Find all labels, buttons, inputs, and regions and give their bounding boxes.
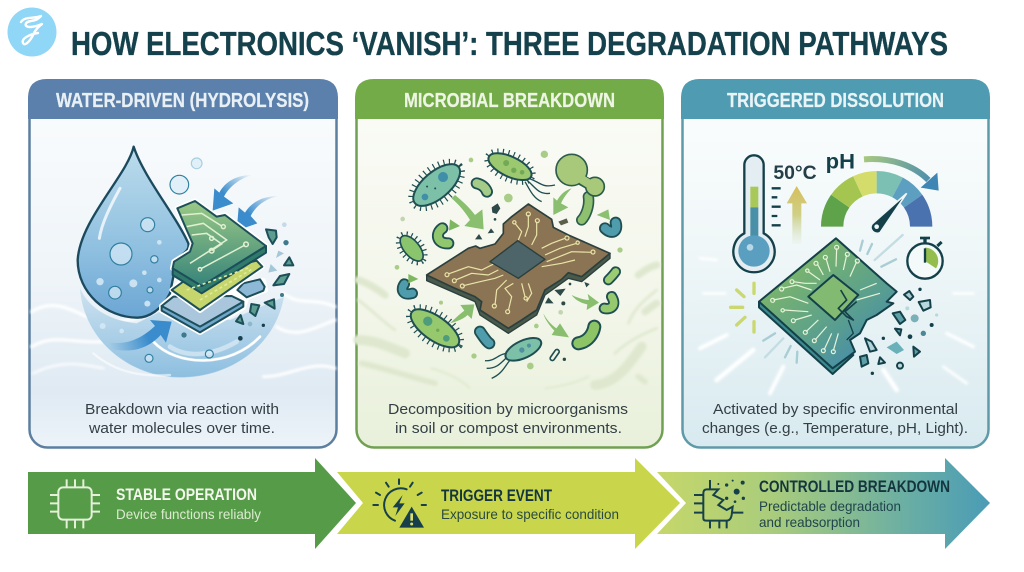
label: pH: pH	[826, 149, 855, 173]
icon: crumbling chip	[694, 480, 745, 528]
illustration: triggers and shattering chip	[700, 149, 973, 393]
panel header: water-driven: WATER-DRIVEN (HYDROLYSIS)	[56, 90, 309, 112]
panel: microbial breakdown	[355, 79, 664, 448]
label: controlled breakdown: Predictable degradation	[759, 498, 901, 514]
circuit board: degraded brown	[427, 204, 610, 333]
process arrow 1: stable operation	[28, 458, 356, 549]
arrows: inward digestion	[408, 188, 610, 337]
microbe: small spiked bacillus	[393, 229, 430, 268]
microbe: lower teal flagellate	[485, 333, 545, 378]
arrow: water flow upper right	[237, 196, 278, 231]
icon: trigger warning	[373, 479, 426, 528]
microbe: lower-left bacillus	[402, 299, 468, 358]
microbe: flagellated green bacillus	[482, 145, 555, 202]
caption: microbial: Decomposition by microorganisms	[388, 401, 628, 418]
label: trigger event: TRIGGER EVENT	[441, 487, 552, 505]
caption: water-driven	[85, 401, 279, 437]
caption: water-driven: water molecules over time.	[88, 420, 275, 437]
label: trigger event: Exposure to specific condition	[441, 506, 619, 522]
process arrow 3: controlled breakdown	[657, 458, 990, 549]
caption: triggered	[702, 401, 968, 437]
panel header: triggered: TRIGGERED DISSOLUTION	[727, 90, 944, 112]
panel header: water-driven	[28, 79, 338, 119]
chip shattering	[759, 238, 897, 374]
microbe: fungal cluster	[556, 154, 604, 220]
microbe: small beans	[402, 183, 616, 358]
arrow: temperature rising	[787, 186, 807, 244]
fragments	[236, 229, 293, 324]
arrow: water flow upper left	[213, 175, 252, 211]
rays: chip energy	[731, 235, 903, 363]
panel header: microbial: MICROBIAL BREAKDOWN	[404, 90, 615, 112]
caption: triggered: changes (e.g., Temperature, pH, Light).	[702, 420, 968, 437]
faint rays	[700, 258, 973, 393]
label: stable operation: STABLE OPERATION	[116, 486, 257, 504]
panel: triggered dissolution	[681, 79, 990, 448]
gauge: pH scale	[821, 171, 932, 233]
label: controlled breakdown: and reabsorption	[759, 514, 860, 530]
icon: stable chip	[50, 479, 100, 528]
thermometer	[733, 155, 781, 272]
panel header: microbial	[355, 79, 664, 119]
label: 50°C: 50°C	[773, 163, 817, 184]
panel header: triggered	[681, 79, 990, 119]
illustration: water drop dissolving circuit layers	[32, 147, 335, 377]
process arrow 2: trigger event	[337, 458, 680, 549]
label: trigger event	[441, 487, 619, 522]
arrow: curved pH shift	[864, 159, 939, 191]
fragments	[860, 291, 931, 369]
caption: triggered: Activated by specific environmental	[713, 401, 958, 418]
panel: water-driven hydrolysis	[28, 79, 338, 448]
caption: water-driven: Breakdown via reaction with	[85, 401, 279, 418]
debris and spores	[395, 151, 623, 369]
circuit layers	[162, 201, 266, 332]
label: controlled breakdown: CONTROLLED BREAKDOWN	[759, 478, 950, 496]
label: controlled breakdown	[759, 478, 950, 530]
label: stable operation: Device functions reliably	[116, 506, 261, 522]
label: stable operation	[116, 486, 261, 522]
logo badge	[8, 8, 56, 56]
microbe: spiked teal bacillus	[403, 153, 470, 217]
stopwatch	[907, 237, 943, 279]
arrow: water flow lower	[108, 320, 172, 350]
caption: microbial: in soil or compost environments.	[395, 420, 622, 437]
caption: microbial	[388, 401, 628, 437]
illustration: microbes digesting circuit board	[358, 145, 657, 388]
